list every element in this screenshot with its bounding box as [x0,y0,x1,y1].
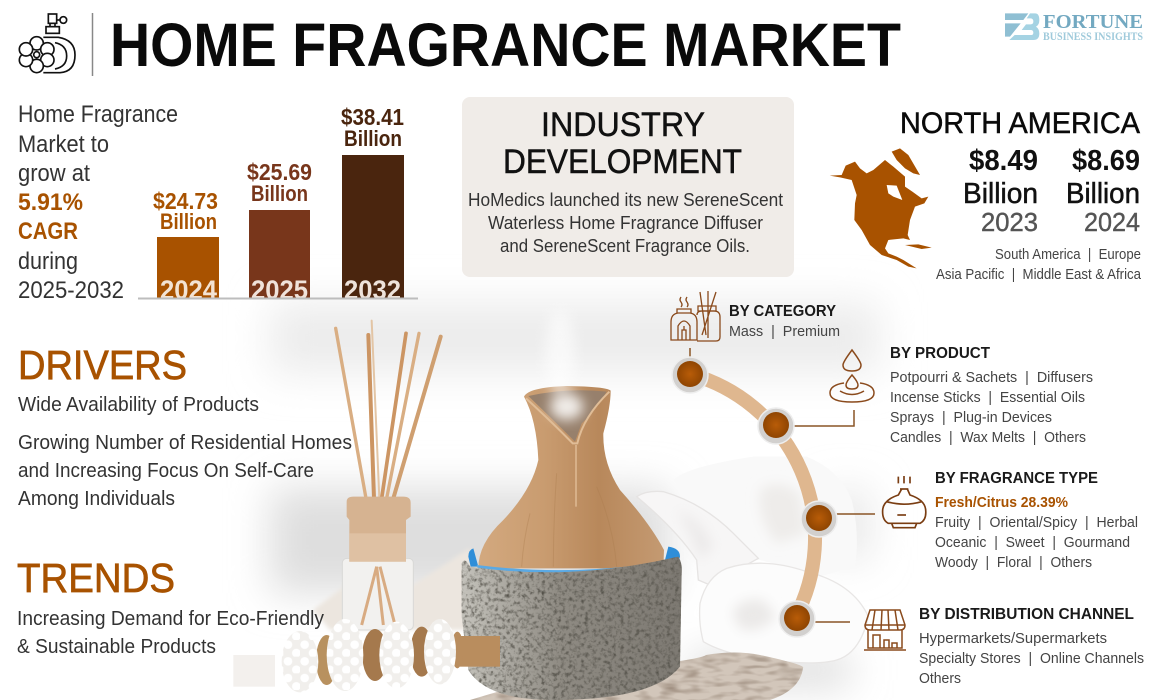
glass bottle [342,497,413,630]
reed sticks [336,321,441,498]
steam [545,310,575,397]
massage roller [233,619,500,692]
text: by product [890,345,1093,446]
panel: industry development: DEVELOPMENT [503,143,742,181]
panel: North America: Billion [1066,178,1140,210]
icon: perfume bottle with flower [19,14,75,73]
text: by fragrance type: Woody | Floral | Others [935,555,1092,571]
bar 2025: $25.69 [247,159,312,185]
bar 2025: 2025 [251,275,308,305]
panel: drivers: Among Individuals [18,488,175,510]
text: market growth statement: during [18,248,78,275]
bar 2032 [341,104,404,305]
panel: drivers: Growing Number of Residential Homes [18,432,352,454]
bar 2024 [153,188,219,305]
heading: by category [729,303,840,340]
text: by fragrance type: Fruity | Oriental/Spicy | Herbal [935,515,1138,531]
text: by distribution channel: BY DISTRIBUTION CHANNEL [919,606,1134,623]
panel: North America: South America | Europe [995,247,1141,263]
text: by distribution channel: Specialty Stores | Online Channels [919,651,1144,667]
logo: Fortune Business Insights: BUSINESS INSIGHTS [1043,29,1143,43]
photo: diffuser, reeds and towels [233,302,880,700]
text: market growth statement: Market to [18,131,109,158]
panel: trends: Increasing Demand for Eco-Friendly [17,608,324,630]
bar 2032: 2032 [344,275,401,305]
panel: drivers: DRIVERS [18,342,187,388]
knit towel behind bottle [313,548,470,630]
bar 2032: Billion [344,126,402,151]
bar 2024: Billion [160,209,217,234]
text: by distribution channel: Others [919,671,961,687]
title: HOME FRAGRANCE MARKET [110,11,901,79]
towels [637,457,868,663]
stone pot [462,547,682,700]
text: by product: Candles | Wax Melts | Others [890,430,1086,446]
panel: industry development: and SereneScent Fragrance Oils. [500,236,750,256]
panel: industry development [462,97,794,277]
icon: water drop and ripple [830,350,874,402]
text: by product: Potpourri & Sachets | Diffusers [890,370,1093,386]
panel: North America: $8.49 [969,145,1038,177]
text: by distribution channel [919,606,1144,687]
panel: North America: Billion [963,178,1038,210]
heading: by category: BY CATEGORY [729,303,836,320]
text: market growth statement: 5.91% [18,189,83,216]
text: by product: Sprays | Plug-in Devices [890,410,1052,426]
icon: store [864,610,906,650]
panel: North America: 2023 [981,207,1038,237]
map: North America [830,148,932,268]
panel: North America: Asia Pacific | Middle East & Africa [936,267,1142,283]
text: by fragrance type: Fresh/Citrus 28.39% [935,495,1068,511]
text: by distribution channel: Hypermarkets/Supermarkets [919,631,1107,647]
bar 2024: 2024 [160,275,217,305]
icon: candle and reed jars [671,291,720,341]
icon: fragrance diffuser [883,476,926,528]
bar 2024: $24.73 [153,188,218,214]
panel: trends [17,555,324,658]
text: market growth statement [18,101,178,304]
panel: drivers [18,342,352,510]
text: by fragrance type: BY FRAGRANCE TYPE [935,470,1098,487]
diffuser body [478,386,664,568]
panel: industry development: Waterless Home Fragrance Diffuser [488,213,763,233]
text: market growth statement: Home Fragrance [18,101,178,128]
segmentation arc with nodes [672,348,875,637]
panel: North America [830,107,1142,283]
text: market growth statement: CAGR [18,218,78,245]
panel: drivers: Wide Availability of Products [18,394,259,416]
panel: North America: 2024 [1084,207,1140,237]
panel: industry development: INDUSTRY [541,106,705,144]
text: market growth statement: grow at [18,160,90,187]
bar 2025 [247,159,312,305]
panel: drivers: and Increasing Focus On Self-Care [18,460,314,482]
logo: Fortune Business Insights: FORTUNE [1043,11,1143,33]
text: by product: BY PRODUCT [890,345,990,362]
text: by product: Incense Sticks | Essential Oils [890,390,1085,406]
panel: trends: TRENDS [17,555,175,601]
text: by fragrance type: Oceanic | Sweet | Gourmand [935,535,1130,551]
bar 2032: $38.41 [341,104,404,130]
text: market growth statement: 2025-2032 [18,277,124,304]
panel: North America: $8.69 [1072,145,1140,177]
heading: by category: Mass | Premium [729,324,840,340]
panel: trends: & Sustainable Products [17,636,216,658]
panel: industry development: HoMedics launched its new SereneScent [468,190,783,210]
bar 2025: Billion [251,181,308,206]
logo: Fortune Business Insights [1005,11,1143,43]
bar chart: market size [138,104,418,305]
woven mat [470,652,803,700]
panel: North America: NORTH AMERICA [900,107,1140,140]
text: by fragrance type [935,470,1138,571]
